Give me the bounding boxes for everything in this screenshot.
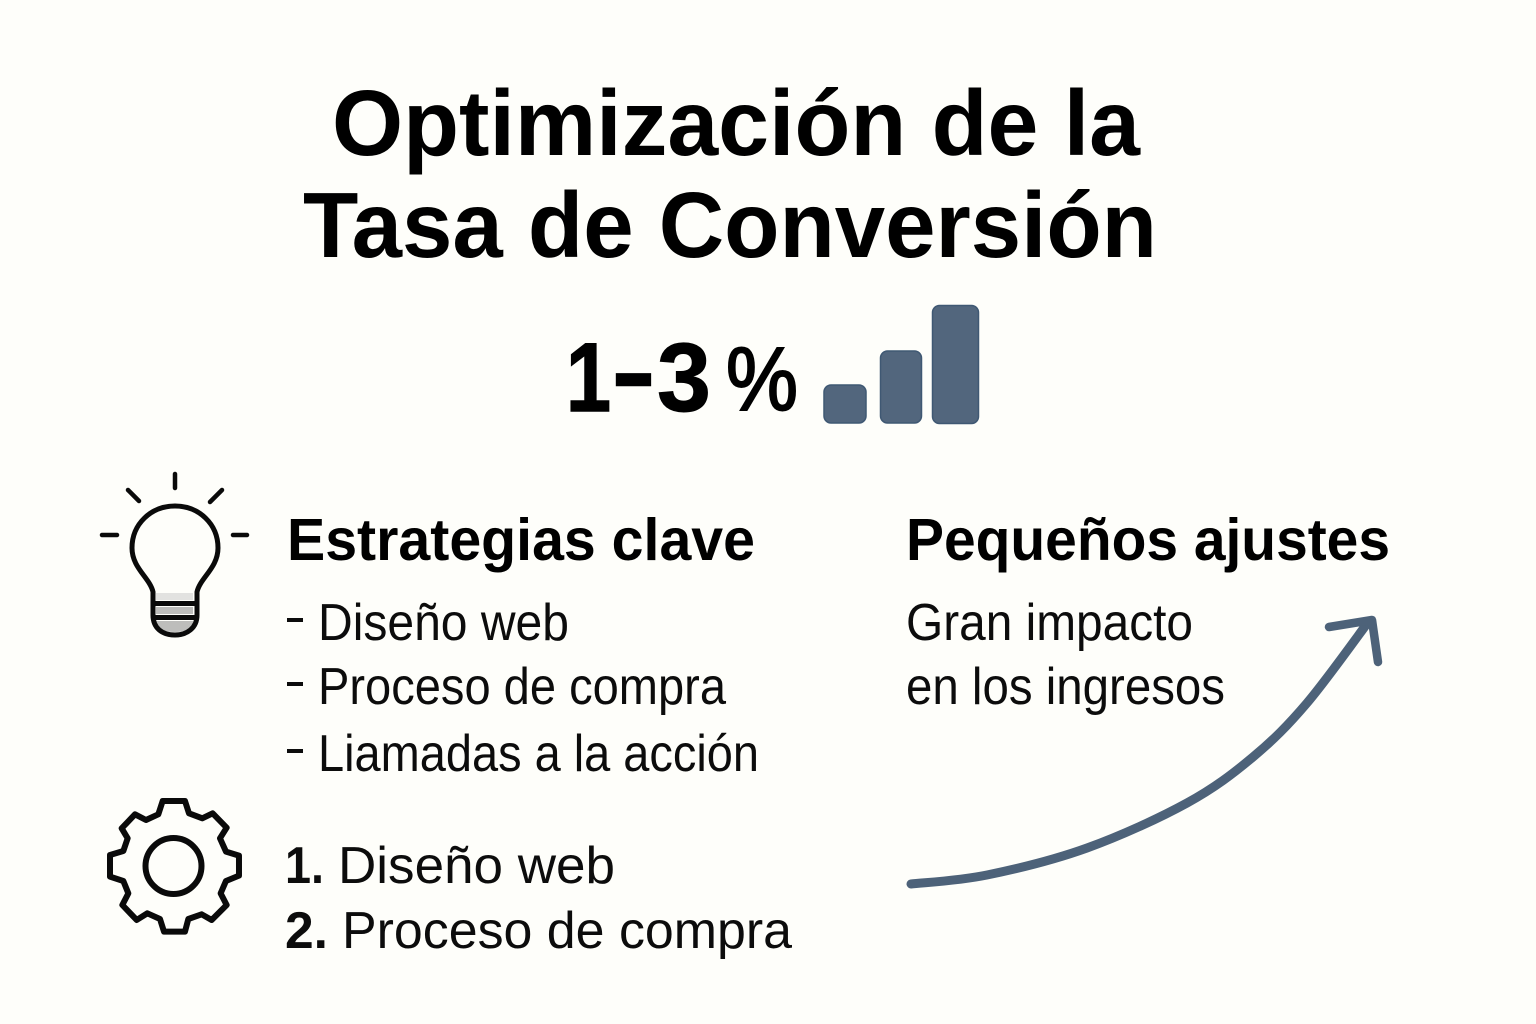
- icon: light bulb: [102, 474, 247, 635]
- icon: gear: [110, 801, 239, 932]
- numbered list: 1.: [285, 837, 324, 895]
- list: estrategias: Proceso de compra: [318, 658, 726, 716]
- title: Tasa de Conversión: [303, 173, 1157, 277]
- list: estrategias: Diseño web: [318, 594, 569, 652]
- text: Gran impacto en los ingresos: en los ingresos: [906, 658, 1225, 716]
- statistic: 1-3 %: –: [615, 318, 652, 427]
- icon: bar chart: [824, 306, 978, 424]
- statistic: 1-3 %: [566, 318, 798, 432]
- arrow: growth curve: [911, 620, 1378, 884]
- statistic: 1-3 %: 3: [657, 323, 711, 432]
- heading: Pequeños ajustes: Pequeños ajustes: [906, 507, 1390, 573]
- text: Gran impacto en los ingresos: Gran impacto: [906, 594, 1193, 652]
- text: Gran impacto en los ingresos: [906, 594, 1225, 716]
- list: estrategias: [287, 594, 759, 783]
- numbered list: 2.: [285, 902, 328, 960]
- numbered list: [285, 837, 792, 960]
- numbered list: Proceso de compra: [342, 902, 792, 960]
- statistic: 1-3 %: %: [726, 330, 798, 430]
- title: [303, 71, 1157, 277]
- title: Optimización de la: [332, 71, 1141, 175]
- heading: Estrategias clave: Estrategias clave: [287, 507, 755, 573]
- list: estrategias: Liamadas a la acción: [318, 725, 759, 783]
- numbered list: Diseño web: [338, 837, 615, 895]
- statistic: 1-3 %: 1: [566, 323, 611, 432]
